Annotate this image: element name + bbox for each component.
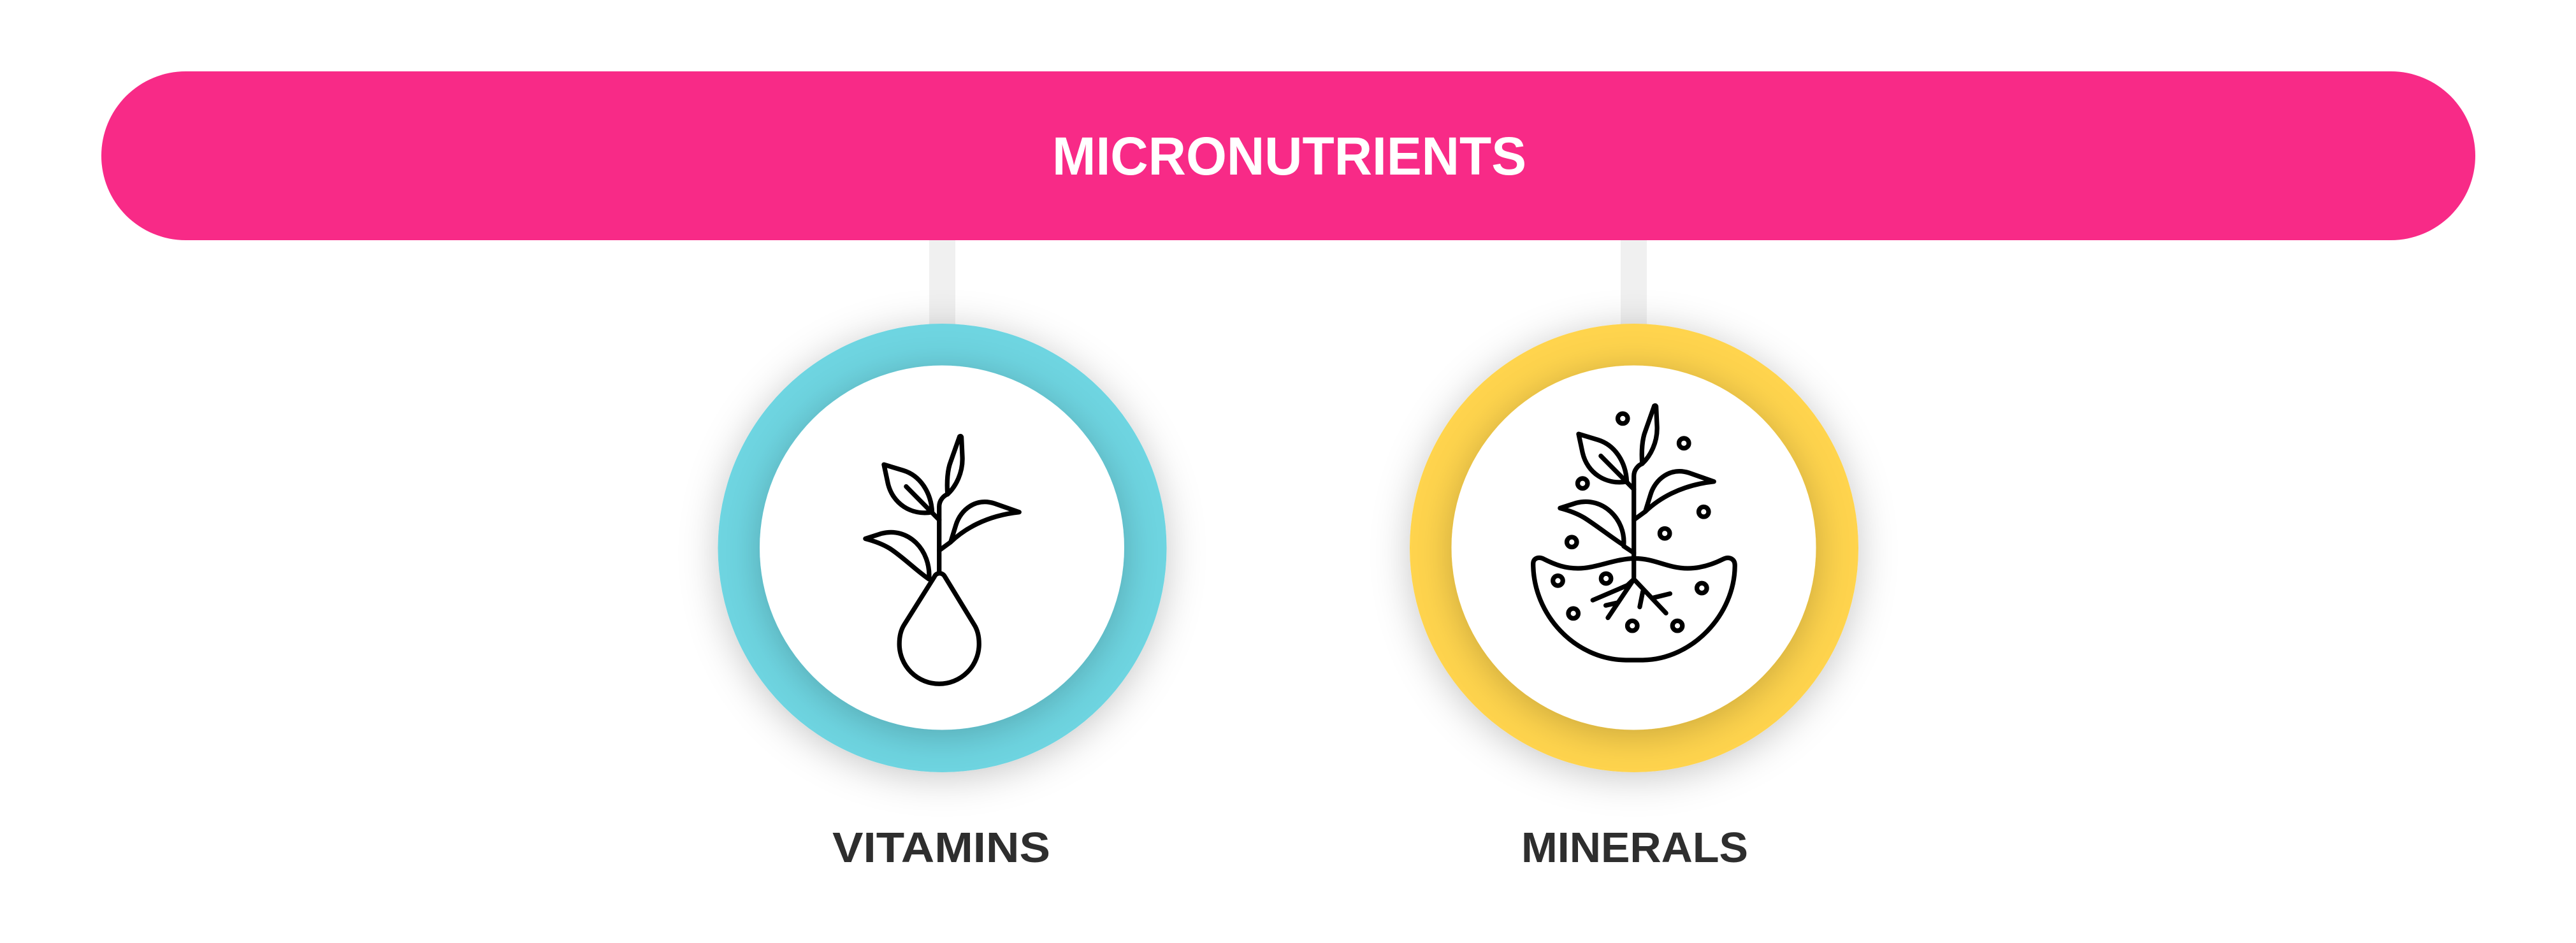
icon: plant with water drop bbox=[865, 436, 1019, 684]
label: minerals: MINERALS bbox=[1521, 824, 1748, 872]
icon: plant in soil with mineral dots bbox=[1533, 405, 1735, 660]
connector: vitamins bbox=[929, 240, 955, 335]
label: vitamins: VITAMINS bbox=[832, 824, 1050, 872]
connector: minerals bbox=[1621, 240, 1647, 335]
panel: vitamins bbox=[718, 324, 1166, 772]
panel: minerals bbox=[1410, 324, 1858, 772]
vitamins inner circle bbox=[760, 366, 1124, 730]
minerals inner circle bbox=[1452, 366, 1816, 730]
minerals ring bbox=[1410, 324, 1858, 772]
vitamins ring bbox=[718, 324, 1166, 772]
title banner bbox=[101, 71, 2475, 240]
title: MICRONUTRIENTS bbox=[1052, 126, 1526, 186]
